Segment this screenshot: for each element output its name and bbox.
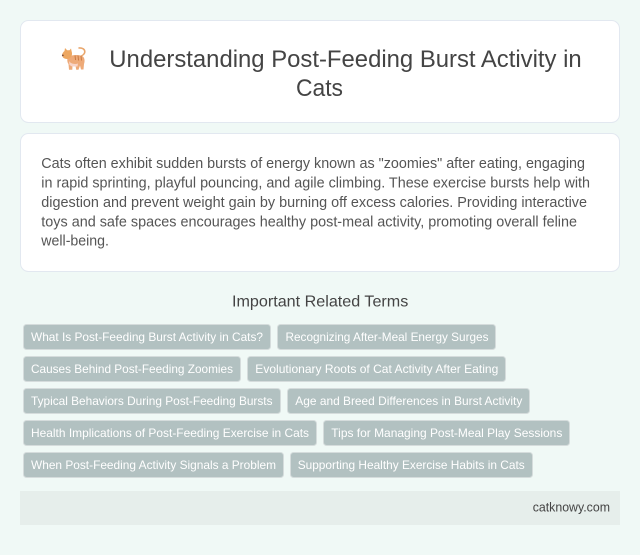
tag (24, 420, 316, 446)
tag: Typical Behaviors During Post-Feeding Bursts (31, 394, 272, 408)
term tags (24, 324, 570, 478)
tag (288, 388, 530, 414)
tag (248, 356, 506, 382)
tag (24, 452, 284, 478)
tag: When Post-Feeding Activity Signals a Problem (31, 458, 276, 472)
footer: catknowy.com (533, 500, 610, 515)
tag: Supporting Healthy Exercise Habits in Cats (298, 458, 525, 472)
heading: related terms: Important Related Terms (232, 294, 408, 311)
title: Understanding Post-Feeding Burst Activity in (109, 46, 582, 73)
tag: Health Implications of Post-Feeding Exercise in Cats (31, 426, 309, 440)
tag: Tips for Managing Post-Meal Play Sessions (331, 426, 562, 440)
tag (290, 452, 532, 478)
text block: description (40, 156, 590, 250)
tag: Age and Breed Differences in Burst Activity (295, 394, 522, 408)
text block: description: well-being. (40, 234, 109, 250)
tag (278, 324, 496, 350)
text block: description: Cats often exhibit sudden bursts of energy known as "zoomies" after eating, engaging (41, 156, 585, 172)
text block: description: toys and safe spaces encourages healthy post-meal activity, promoting overall feline (41, 214, 577, 230)
footer (20, 491, 620, 525)
tag (324, 420, 570, 446)
tag (24, 388, 280, 414)
title: Cats (296, 75, 343, 102)
icon: cat (62, 48, 85, 70)
tag: Evolutionary Roots of Cat Activity After Eating (255, 362, 498, 376)
panel: title card (20, 20, 620, 122)
tag: Recognizing After-Meal Energy Surges (286, 330, 488, 344)
text block: description: digestion and prevent weight gain by burning off excess calories. Providing interactive (41, 195, 587, 211)
text block: description: in rapid sprinting, playful pouncing, and agile climbing. These exercise bursts help with (41, 175, 590, 191)
title (109, 46, 582, 102)
tag (24, 356, 240, 382)
tag (24, 324, 270, 350)
tag: What Is Post-Feeding Burst Activity in Cats? (31, 330, 263, 344)
tag: Causes Behind Post-Feeding Zoomies (31, 362, 233, 376)
panel: description (20, 134, 620, 272)
